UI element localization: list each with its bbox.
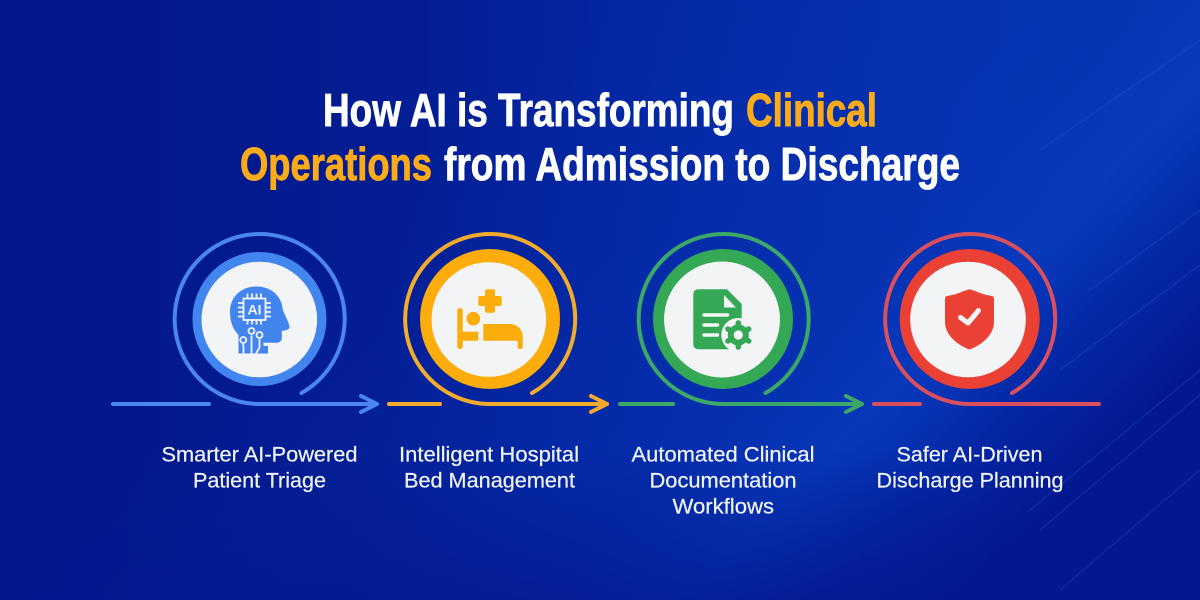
- spiral arrow: green: [620, 234, 862, 412]
- title: from Admission to Discharge: [444, 138, 960, 190]
- label: Workflows: [672, 496, 774, 518]
- label: Patient Triage: [193, 470, 326, 492]
- step 4: safer AI-driven discharge planning: [874, 234, 1099, 493]
- label: [162, 444, 358, 492]
- spiral arrow: blue: [113, 234, 377, 412]
- icon: document with gear: [693, 289, 755, 352]
- label: Intelligent Hospital: [399, 444, 579, 466]
- label: [876, 444, 1064, 492]
- step 2: intelligent hospital bed management: [389, 234, 607, 493]
- title: [240, 84, 960, 190]
- label: Automated Clinical: [632, 444, 814, 466]
- label: Safer AI-Driven: [896, 444, 1042, 466]
- step 1: smarter AI-powered patient triage: [113, 234, 377, 492]
- icon: AI head: [230, 286, 290, 354]
- label: Bed Management: [404, 470, 575, 492]
- title: Operations: [240, 138, 432, 190]
- icon ring: orange: [420, 249, 560, 389]
- spiral arrow: orange: [389, 234, 607, 412]
- title: Clinical: [746, 84, 877, 136]
- label: Smarter AI-Powered: [162, 444, 358, 466]
- icon ring: blue: [192, 252, 326, 386]
- label: [399, 444, 579, 492]
- icon ring: red: [900, 249, 1040, 389]
- title: How AI is Transforming: [323, 84, 734, 136]
- label: [632, 444, 814, 518]
- icon ring: green: [653, 249, 793, 389]
- step 3: automated clinical documentation workflows: [620, 234, 862, 519]
- label: Documentation: [650, 470, 796, 492]
- icon: shield with check: [945, 289, 994, 349]
- icon: hospital bed: [457, 289, 523, 349]
- icon: AI head: AI: [248, 302, 262, 318]
- label: Discharge Planning: [876, 470, 1064, 492]
- spiral line: red: [874, 234, 1099, 404]
